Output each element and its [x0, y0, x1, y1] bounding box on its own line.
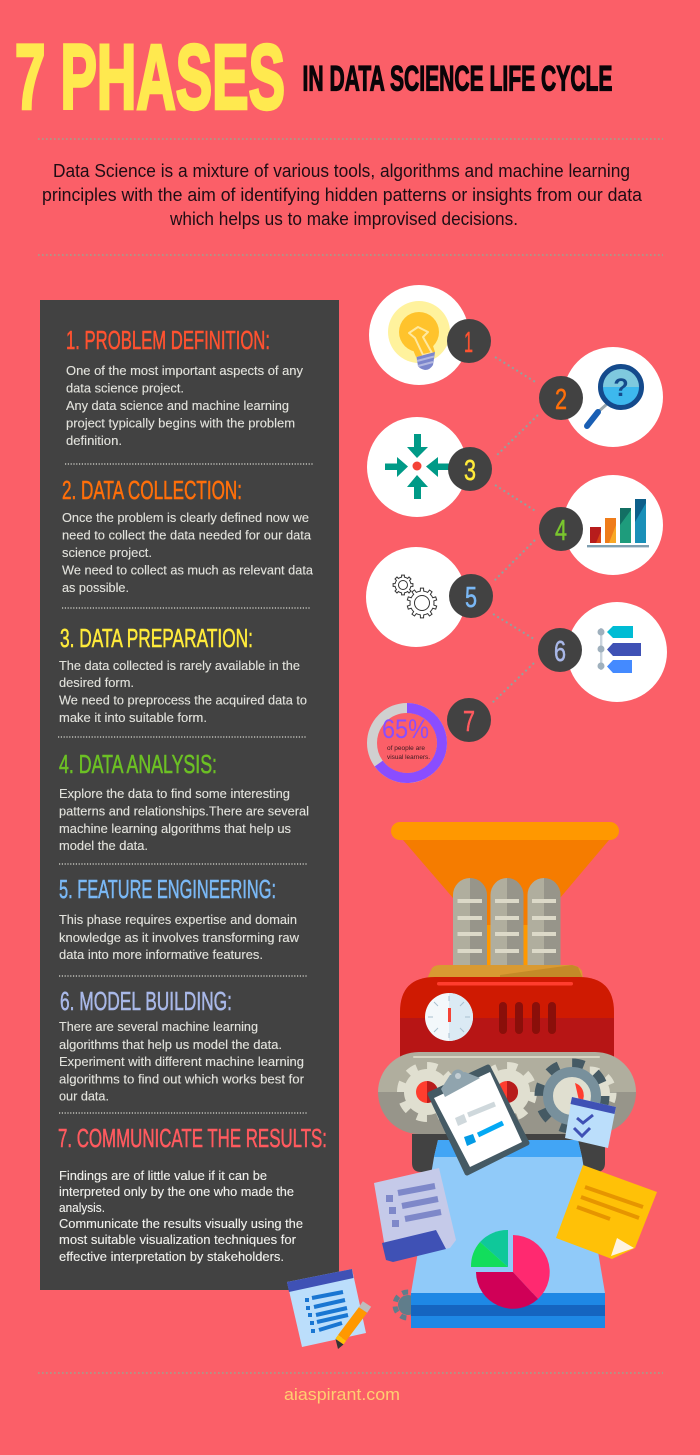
phase 7 text: 7. COMMUNICATE THE RESULTS: [58, 1125, 327, 1153]
phase 7 text: most suitable visualization techniques for [59, 1232, 297, 1247]
gauge dial [425, 993, 473, 1041]
badge: number 5 [449, 574, 493, 618]
phase 4 text: patterns and relationships.There are several [59, 804, 309, 818]
intro text block [42, 160, 643, 229]
tan lid [427, 965, 583, 979]
phase 1 text [66, 327, 303, 448]
input columns [453, 878, 560, 965]
badge: number 1: 1 [464, 327, 473, 359]
phase 2 text: as possible. [62, 580, 129, 595]
phase 1 text: Any data science and machine learning [66, 398, 289, 413]
blue output box [411, 1140, 605, 1328]
badge: number 4 [539, 507, 583, 551]
phase 5 text: 5. FEATURE ENGINEERING: [59, 876, 276, 904]
donut chart: 65 percent: 65% [382, 714, 429, 744]
phase 7 text: interpreted only by the one who made the [59, 1184, 294, 1199]
phase 1 text: 1. PROBLEM DEFINITION: [66, 327, 270, 355]
connector dotted lines [491, 357, 538, 704]
badge: number 4: 4 [555, 515, 567, 547]
phase 5 text: knowledge as it involves transforming raw [59, 930, 300, 945]
icon: gears [366, 547, 466, 647]
phase 1 text: data science project. [66, 380, 184, 396]
badge: number 3 [448, 447, 492, 491]
badge: number 7: 7 [463, 706, 475, 738]
phase 3 text: The data collected is rarely available in the [59, 658, 300, 673]
phase 2 text: Once the problem is clearly defined now we [62, 510, 309, 525]
phase 3 text: make it into suitable form. [59, 710, 207, 725]
phase 2 text: need to collect the data needed for our data [62, 528, 312, 542]
phase 7 text: Findings are of little value if it can be [59, 1168, 267, 1183]
phase 4 text: machine learning algorithms that help us [59, 821, 291, 836]
phase 2 text [62, 477, 314, 595]
gear housing [378, 1052, 636, 1134]
icon: light bulb [369, 285, 469, 385]
phase 6 text: Experiment with different machine learning [59, 1054, 304, 1069]
title: 7 phases: 7 PHASES [15, 26, 285, 128]
yellow sticky note [556, 1165, 657, 1259]
phase 4 text: model the data. [59, 838, 148, 853]
badge: number 2: 2 [555, 384, 567, 416]
phase 6 text: algorithms to find out which works best for [59, 1072, 305, 1086]
pencil [336, 1304, 367, 1349]
icon: magnifier question [563, 347, 663, 447]
lavender scroll document [374, 1168, 456, 1262]
badge: number 6: 6 [554, 636, 566, 668]
phase 7 text: Communicate the results visually using the [59, 1216, 303, 1231]
phase 2 text: We need to collect as much as relevant data [62, 562, 314, 578]
intro text block: principles with the aim of identifying hidden patterns or insights from our data [42, 184, 643, 205]
phase 4 text [59, 751, 309, 853]
footer: website: aiaspirant.com [284, 1385, 400, 1404]
phase 5 text: data into more informative features. [59, 947, 263, 962]
pie chart [471, 1230, 550, 1309]
red machine body [400, 977, 614, 1058]
phase 2 text: 2. DATA COLLECTION: [62, 477, 242, 505]
phase 7 text: effective interpretation by stakeholders. [59, 1249, 284, 1264]
phase 3 text [59, 625, 307, 725]
icon: magnifier question: ? [613, 374, 629, 402]
phase 7 text [58, 1125, 327, 1264]
phase 6 text [59, 988, 305, 1104]
icon: timeline tags [567, 602, 667, 702]
panel: seven phases [40, 300, 339, 1290]
clipboard [430, 1067, 527, 1173]
phase 3 text: desired form. [59, 675, 134, 690]
phase 5 text: This phase requires expertise and domain [59, 912, 297, 927]
gears in housing [401, 1063, 613, 1129]
dark stand [412, 1134, 605, 1172]
badge: number 2 [539, 376, 583, 420]
badge: number 1 [447, 319, 491, 363]
phase 5 text [59, 876, 300, 962]
badge: number 6 [538, 628, 582, 672]
phase 3 text: We need to preprocess the acquired data to [59, 692, 307, 708]
badge: number 7 [447, 698, 491, 742]
intro text block: Data Science is a mixture of various tools, algorithms and machine learning [53, 160, 630, 181]
phase 6 text: 6. MODEL BUILDING: [60, 988, 232, 1016]
phase 3 text: 3. DATA PREPARATION: [60, 625, 253, 653]
illustration: data machine [287, 822, 657, 1349]
donut chart: 65 percent: visual learners. [387, 754, 430, 761]
icon: converging arrows [367, 417, 467, 517]
phase 6 text: algorithms that help us model the data. [59, 1037, 282, 1052]
phase 2 text: science project. [62, 545, 152, 560]
phase 6 text: our data. [59, 1088, 109, 1104]
funnel [391, 822, 619, 965]
badge: number 3: 3 [464, 455, 476, 487]
phase 1 text: One of the most important aspects of any [66, 363, 303, 378]
phase 6 text: There are several machine learning [59, 1019, 258, 1034]
badge: number 5: 5 [465, 582, 477, 614]
phase 1 text: project typically begins with the problem [66, 416, 295, 430]
phase 4 text: Explore the data to find some interesting [59, 786, 290, 801]
donut chart: 65 percent: of people are [387, 745, 425, 752]
phase 7 text: analysis. [59, 1200, 105, 1215]
notepad with list [287, 1269, 366, 1347]
small gear behind box [395, 1292, 421, 1318]
phase 1 text: definition. [66, 433, 122, 448]
checklist card [565, 1097, 616, 1148]
intro text block: which helps us to make improvised decisions. [169, 208, 518, 229]
phase 4 text: 4. DATA ANALYSIS: [59, 751, 217, 779]
donut chart: 65 percent [372, 708, 442, 778]
icon: bar chart [563, 475, 663, 575]
